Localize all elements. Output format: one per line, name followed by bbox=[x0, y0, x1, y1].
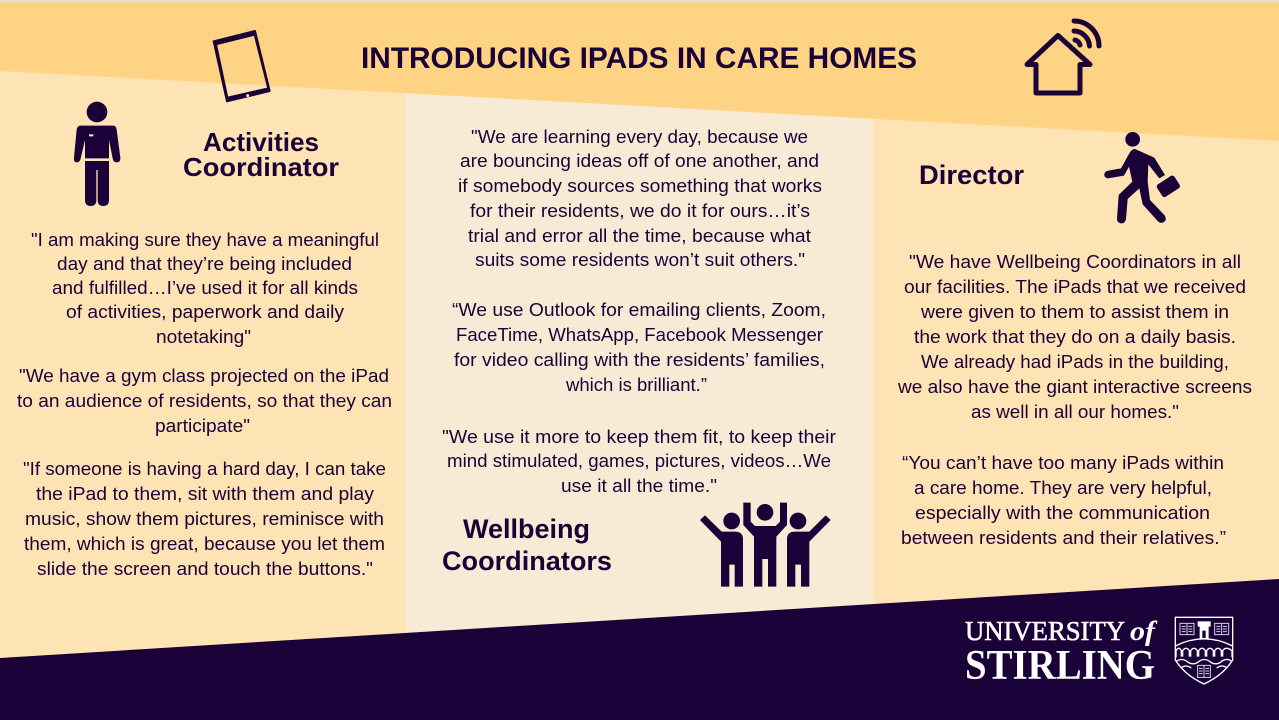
quote: keep them fit: use it all the time." bbox=[561, 476, 717, 496]
icon: standing person bbox=[74, 102, 120, 206]
quote: wellbeing coordinators in all facilities: We already had iPads in the building, bbox=[921, 352, 1229, 372]
quote: too many ipads bbox=[901, 453, 1226, 548]
quote: wellbeing coordinators in all facilities: the work that they do on a daily basis. bbox=[914, 327, 1236, 347]
quote: learning every day: suits some residents won’t suit others." bbox=[475, 250, 805, 270]
quote: too many ipads: between residents and their relatives.” bbox=[901, 528, 1226, 548]
quote: meaningful day: "I am making sure they have a meaningful bbox=[31, 230, 379, 250]
header band bbox=[0, 2, 1279, 141]
quote: outlook and zoom: which is brilliant.” bbox=[565, 375, 707, 395]
logo wordmark: of bbox=[1130, 616, 1158, 646]
quote: keep them fit: mind stimulated, games, pictures, videos…We bbox=[447, 451, 831, 471]
heading: wellbeing coordinators bbox=[442, 514, 612, 576]
logo wordmark: STIRLING bbox=[965, 643, 1155, 689]
panel: director bbox=[897, 132, 1252, 548]
quote: outlook and zoom: for video calling with the residents’ families, bbox=[454, 350, 825, 370]
quote: meaningful day bbox=[31, 230, 379, 347]
quote: meaningful day: day and that they’re being included bbox=[57, 254, 352, 274]
quote: wellbeing coordinators in all facilities: were given to them to assist them in bbox=[920, 302, 1229, 322]
icon: house with wifi bbox=[1027, 21, 1099, 93]
quote: wellbeing coordinators in all facilities: we also have the giant interactive screens bbox=[897, 377, 1252, 397]
quote: wellbeing coordinators in all facilities bbox=[897, 252, 1252, 422]
quote: meaningful day: notetaking" bbox=[156, 327, 251, 347]
quote: keep them fit: "We use it more to keep them fit, to keep their bbox=[442, 427, 836, 447]
quote: learning every day: "We are learning every day, because we bbox=[471, 127, 808, 147]
quote: outlook and zoom bbox=[452, 300, 826, 395]
quote: meaningful day: and fulfilled…I’ve used it for all kinds bbox=[52, 278, 358, 298]
heading: activities coordinator: Coordinator bbox=[183, 152, 339, 182]
quote: too many ipads: a care home. They are very helpful, bbox=[914, 478, 1212, 498]
quote: gym class: to an audience of residents, so that they can bbox=[17, 391, 392, 411]
quote: outlook and zoom: “We use Outlook for emailing clients, Zoom, bbox=[452, 300, 826, 320]
quote: wellbeing coordinators in all facilities: as well in all our homes." bbox=[971, 402, 1179, 422]
title: INTRODUCING IPADS IN CARE HOMES bbox=[361, 42, 917, 75]
icon: tablet bbox=[214, 31, 270, 101]
quote: wellbeing coordinators in all facilities: our facilities. The iPads that we received bbox=[904, 277, 1246, 297]
panel content: wellbeing coordinators bbox=[442, 127, 836, 587]
panel: wellbeing coordinators bbox=[405, 90, 873, 640]
quote: learning every day: for their residents, we do it for ours…it’s bbox=[470, 201, 810, 221]
heading: wellbeing coordinators: Wellbeing bbox=[463, 514, 590, 544]
quote: learning every day: are bouncing ideas off of one another, and bbox=[460, 151, 819, 171]
quote: learning every day: if somebody sources something that works bbox=[458, 176, 822, 196]
quote: hard day bbox=[23, 459, 386, 579]
quote: hard day: the iPad to them, sit with them and play bbox=[36, 484, 374, 504]
quote: learning every day bbox=[458, 127, 822, 270]
footer band bbox=[0, 579, 1279, 720]
quote: outlook and zoom: FaceTime, WhatsApp, Facebook Messenger bbox=[456, 325, 823, 345]
quote: gym class: participate" bbox=[155, 416, 250, 436]
quote: hard day: "If someone is having a hard day, I can take bbox=[23, 459, 386, 479]
quote: too many ipads: “You can’t have too many iPads within bbox=[902, 453, 1224, 473]
panel: activities coordinator bbox=[17, 102, 392, 579]
heading: director: Director bbox=[919, 160, 1024, 190]
logo shield crest bbox=[1175, 617, 1233, 684]
heading: activities coordinator bbox=[183, 127, 339, 182]
quote: hard day: slide the screen and touch the buttons." bbox=[37, 559, 373, 579]
logo wordmark bbox=[965, 616, 1158, 689]
quote: keep them fit bbox=[442, 427, 836, 496]
quote: gym class bbox=[17, 366, 392, 436]
quote: learning every day: trial and error all the time, because what bbox=[468, 226, 811, 246]
heading: activities coordinator: Activities bbox=[203, 127, 319, 157]
heading: wellbeing coordinators: Coordinators bbox=[442, 546, 612, 576]
icon: three people with raised arms bbox=[700, 503, 831, 587]
logo: university of stirling bbox=[965, 616, 1233, 689]
quote: wellbeing coordinators in all facilities: "We have Wellbeing Coordinators in all bbox=[909, 252, 1241, 272]
icon: walking person with briefcase bbox=[1104, 132, 1181, 223]
quote: too many ipads: especially with the communication bbox=[915, 503, 1210, 523]
quote: meaningful day: of activities, paperwork and daily bbox=[66, 302, 344, 322]
quote: gym class: "We have a gym class projected on the iPad bbox=[19, 366, 389, 386]
quote: hard day: music, show them pictures, reminisce with bbox=[25, 509, 384, 529]
quote: hard day: them, which is great, because you let them bbox=[24, 534, 385, 554]
logo wordmark: UNIVERSITY bbox=[965, 616, 1125, 646]
